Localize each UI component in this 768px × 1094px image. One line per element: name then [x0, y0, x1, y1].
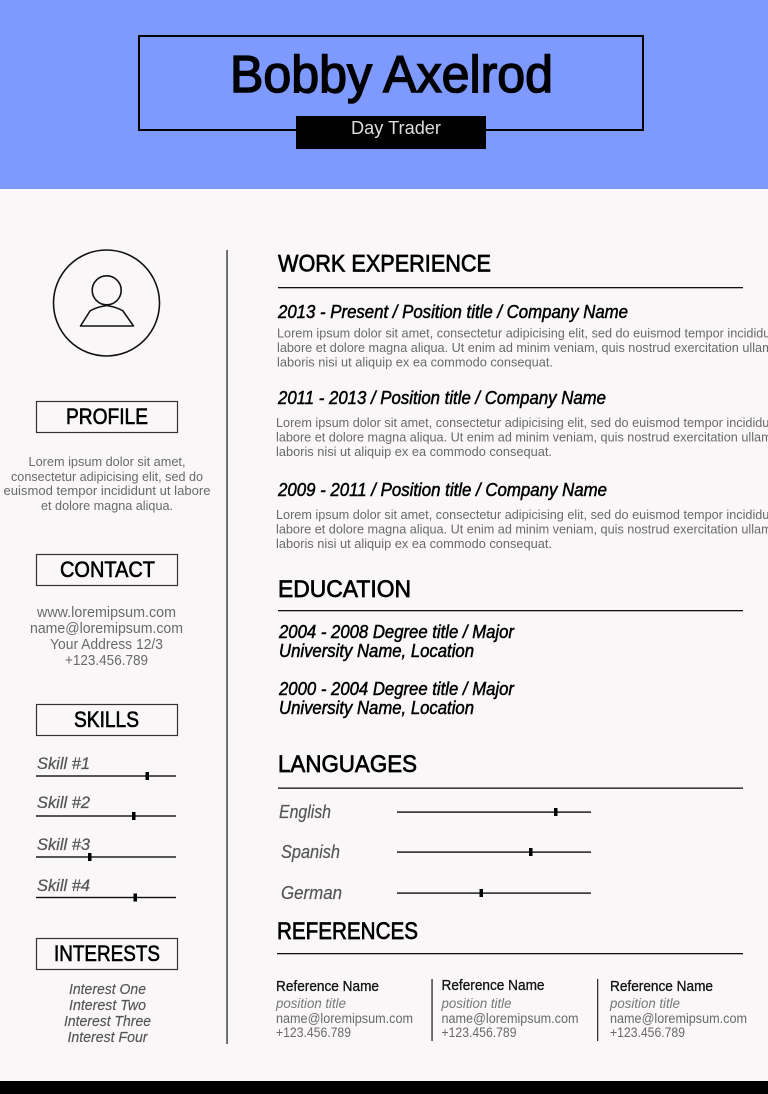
- degree 2: [278, 679, 515, 718]
- reference 1: position title: [275, 996, 346, 1011]
- skill 1: [36, 754, 176, 780]
- profile text: et dolore magna aliqua.: [41, 498, 173, 513]
- reference 3: Reference Name: [610, 979, 713, 995]
- icon: profile avatar: [54, 250, 160, 356]
- heading: profile: [36, 402, 178, 432]
- language: Spanish: [281, 842, 591, 862]
- reference 2: position title: [441, 996, 512, 1011]
- heading: contact: CONTACT: [60, 557, 155, 582]
- language: Spanish: Spanish: [281, 842, 340, 862]
- language: German: [281, 883, 591, 903]
- heading: work experience: WORK EXPERIENCE: [278, 250, 491, 278]
- header banner: [0, 0, 768, 189]
- interests list: Interest One: [69, 982, 146, 998]
- reference divider 1: [431, 979, 433, 1041]
- job title badge: [296, 116, 486, 149]
- heading: education: EDUCATION: [278, 576, 411, 603]
- panel: work experience: [276, 250, 768, 551]
- reference 1: +123.456.789: [276, 1025, 351, 1040]
- heading: interests: INTERESTS: [54, 941, 160, 966]
- degree 1: 2004 - 2008 Degree title / Major: [278, 622, 515, 642]
- heading: skills: SKILLS: [74, 707, 139, 732]
- job 2: 2011 - 2013 / Position title / Company Name: [277, 388, 606, 408]
- job 2: [276, 388, 768, 459]
- reference 2: [441, 978, 578, 1040]
- reference 3: position title: [609, 996, 680, 1011]
- skill 1: Skill #1: [37, 754, 90, 773]
- reference 1: name@loremipsum.com: [276, 1011, 413, 1026]
- interests list: Interest Two: [69, 998, 146, 1014]
- reference 2: +123.456.789: [442, 1025, 516, 1040]
- panel: education: [278, 576, 743, 718]
- skill 4: Skill #4: [37, 876, 90, 895]
- profile text: Lorem ipsum dolor sit amet,: [28, 454, 186, 469]
- heading: references: REFERENCES: [277, 918, 418, 945]
- degree 2: University Name, Location: [279, 698, 474, 718]
- sidebar divider: [226, 250, 228, 1044]
- skill 3: [36, 835, 176, 861]
- name frame: [139, 36, 643, 130]
- panel: references: [275, 918, 747, 1041]
- job 1: laboris nisi ut aliquip ex ea commodo consequat.: [277, 354, 553, 370]
- interests list: Interest Three: [64, 1014, 151, 1030]
- panel: interests: [36, 938, 178, 1046]
- reference 1: [275, 979, 413, 1040]
- skill 2: [36, 793, 176, 820]
- skill 2: Skill #2: [37, 793, 91, 812]
- degree 1: [278, 622, 515, 661]
- language: English: [279, 802, 591, 822]
- reference 3: [609, 979, 747, 1040]
- footer bar: [0, 1081, 768, 1094]
- panel: profile: [4, 402, 210, 513]
- profile text: euismod tempor incididunt ut labore: [4, 483, 210, 498]
- reference 2: name@loremipsum.com: [442, 1011, 578, 1026]
- job 1: [277, 302, 768, 370]
- contact details: name@loremipsum.com: [30, 621, 183, 637]
- contact details: www.loremipsum.com: [36, 605, 176, 621]
- skill 4: [36, 876, 176, 902]
- job 3: [276, 480, 768, 551]
- heading: contact: [36, 554, 178, 586]
- job 2: laboris nisi ut aliquip ex ea commodo consequat.: [276, 444, 552, 459]
- profile text: [4, 454, 210, 513]
- heading: profile: PROFILE: [66, 404, 148, 429]
- job 1: 2013 - Present / Position title / Company Name: [277, 302, 628, 322]
- interests list: [64, 982, 151, 1046]
- skill 3: Skill #3: [37, 835, 91, 854]
- contact details: [30, 605, 183, 669]
- degree 2: 2000 - 2004 Degree title / Major: [278, 679, 515, 699]
- job title badge: Day Trader: [351, 118, 441, 138]
- degree 1: University Name, Location: [279, 641, 474, 661]
- profile text: consectetur adipicising elit, sed do: [11, 469, 203, 484]
- panel: languages: [278, 751, 743, 903]
- contact details: Your Address 12/3: [50, 637, 163, 653]
- panel: skills: [36, 704, 178, 902]
- title: name: Bobby Axelrod: [230, 46, 553, 104]
- heading: skills: [36, 704, 178, 736]
- reference divider 2: [597, 979, 598, 1041]
- language: German: German: [281, 883, 342, 903]
- reference 3: name@loremipsum.com: [610, 1011, 747, 1026]
- panel: contact: [30, 554, 183, 669]
- contact details: +123.456.789: [65, 653, 148, 669]
- job 3: laboris nisi ut aliquip ex ea commodo consequat.: [276, 536, 552, 551]
- heading: languages: LANGUAGES: [278, 751, 417, 778]
- language: English: English: [279, 802, 331, 822]
- reference 1: Reference Name: [276, 979, 379, 995]
- job 3: 2009 - 2011 / Position title / Company Name: [277, 480, 607, 500]
- interests list: Interest Four: [68, 1030, 149, 1046]
- reference 2: Reference Name: [442, 978, 544, 994]
- reference 3: +123.456.789: [610, 1025, 685, 1040]
